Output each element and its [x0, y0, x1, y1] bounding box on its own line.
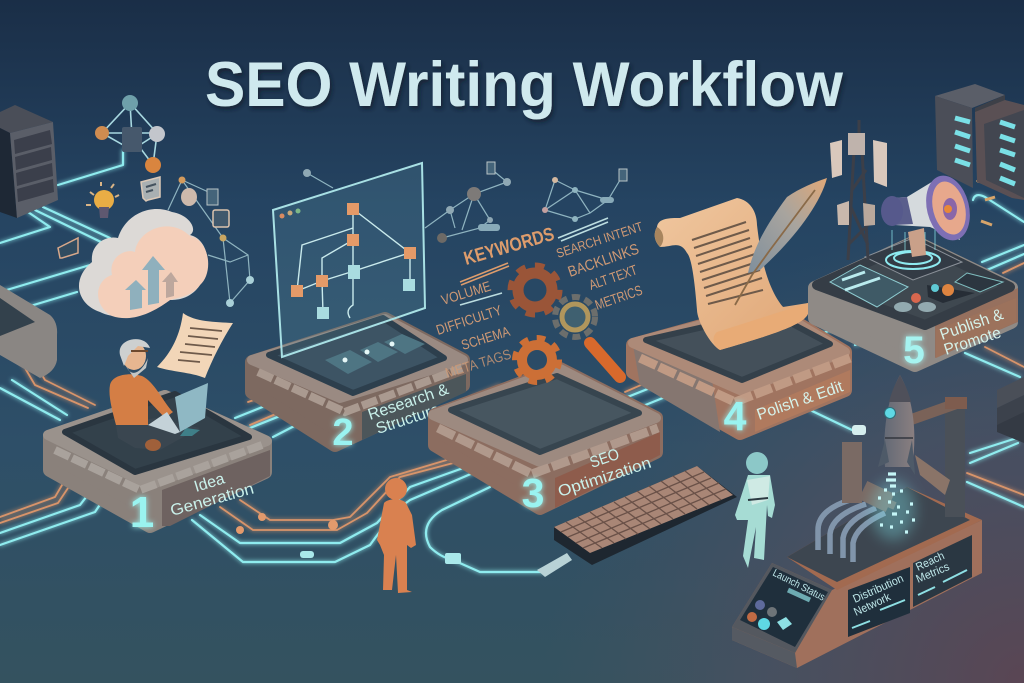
title: SEO Writing Workflow — [205, 50, 844, 120]
word: schema: SCHEMA — [459, 323, 512, 353]
icon: light bulb — [86, 182, 119, 218]
icon: right servers — [935, 84, 1024, 200]
step number 2: 2 — [332, 412, 354, 454]
panel: reach metrics: Metrics — [914, 561, 952, 586]
icon: hologram ring — [886, 228, 940, 269]
icon: network nodes top left — [95, 95, 165, 173]
platform 3: Optimization — [556, 455, 653, 501]
floating nodes centre — [303, 162, 627, 243]
icon: floating paper — [157, 313, 233, 378]
floating keywords — [434, 219, 645, 381]
platform 1: Generation — [169, 480, 256, 520]
label plate — [555, 432, 660, 508]
keyboard — [554, 466, 737, 565]
label: Publish & — [938, 306, 1006, 344]
word: meta tags: META TAGS — [443, 346, 513, 381]
circuit nodes — [236, 425, 866, 564]
panel: distribution network: Distribution — [851, 573, 906, 606]
right edge block — [997, 377, 1024, 443]
icon: megaphone — [881, 171, 995, 257]
word: difficulty: DIFFICULTY — [434, 301, 504, 338]
label plate — [755, 370, 850, 432]
holographic panel — [273, 163, 425, 357]
platform 5: Promote — [942, 324, 1003, 359]
icon: chat bubble — [141, 177, 160, 201]
circuit lines — [0, 150, 1024, 572]
label: Research & — [366, 381, 451, 424]
icon: left server rack — [0, 105, 58, 218]
platform 2: Structure — [374, 401, 442, 438]
figure: robot — [735, 452, 775, 568]
gantry — [852, 442, 890, 503]
network right of cloud — [168, 176, 254, 307]
arrow: flow end marker — [537, 553, 572, 577]
icon: small card — [58, 238, 78, 258]
word: backlinks: BACKLINKS — [566, 241, 641, 281]
panel: launch status — [740, 567, 828, 647]
figure: writer with laptop — [109, 339, 208, 451]
platform 2 — [252, 318, 466, 454]
label plate — [162, 450, 270, 526]
panel: launch status: Launch Status — [771, 567, 827, 604]
platform 5 — [815, 238, 1018, 372]
word: volume: VOLUME — [439, 278, 493, 308]
icon: scroll and quill — [655, 178, 827, 350]
label plate — [936, 298, 1016, 358]
label: Idea — [192, 470, 227, 496]
label plate — [362, 374, 466, 440]
left edge platform — [0, 285, 57, 378]
word: alt text: ALT TEXT — [587, 261, 640, 293]
step number 4: 4 — [724, 393, 747, 439]
panel: distribution network — [848, 567, 910, 637]
keyword underlines — [460, 218, 608, 305]
icon: gears and magnifier — [511, 266, 620, 382]
sparks — [871, 480, 915, 540]
panel: reach metrics — [913, 535, 972, 607]
platform 4 — [633, 307, 850, 439]
word: metrics: METRICS — [593, 282, 644, 313]
step number 1: 1 — [130, 488, 154, 537]
word: search intent: SEARCH INTENT — [554, 219, 645, 261]
pipes — [818, 500, 885, 562]
platform 3 — [433, 369, 660, 516]
label: SEO — [588, 446, 622, 472]
word: keywords: KEYWORDS — [462, 224, 557, 270]
label: Polish & Edit — [755, 378, 846, 424]
icon: cloud upload — [79, 209, 208, 318]
panel: distribution network: Network — [852, 591, 893, 619]
step number 5: 5 — [903, 329, 925, 372]
platform 1 — [48, 394, 270, 537]
icon: cell tower — [830, 120, 887, 260]
panel: reach metrics: Reach — [914, 550, 946, 574]
figure: orange person — [377, 478, 416, 593]
launch console — [732, 375, 982, 668]
rocket — [884, 375, 914, 467]
step number 3: 3 — [522, 470, 544, 516]
